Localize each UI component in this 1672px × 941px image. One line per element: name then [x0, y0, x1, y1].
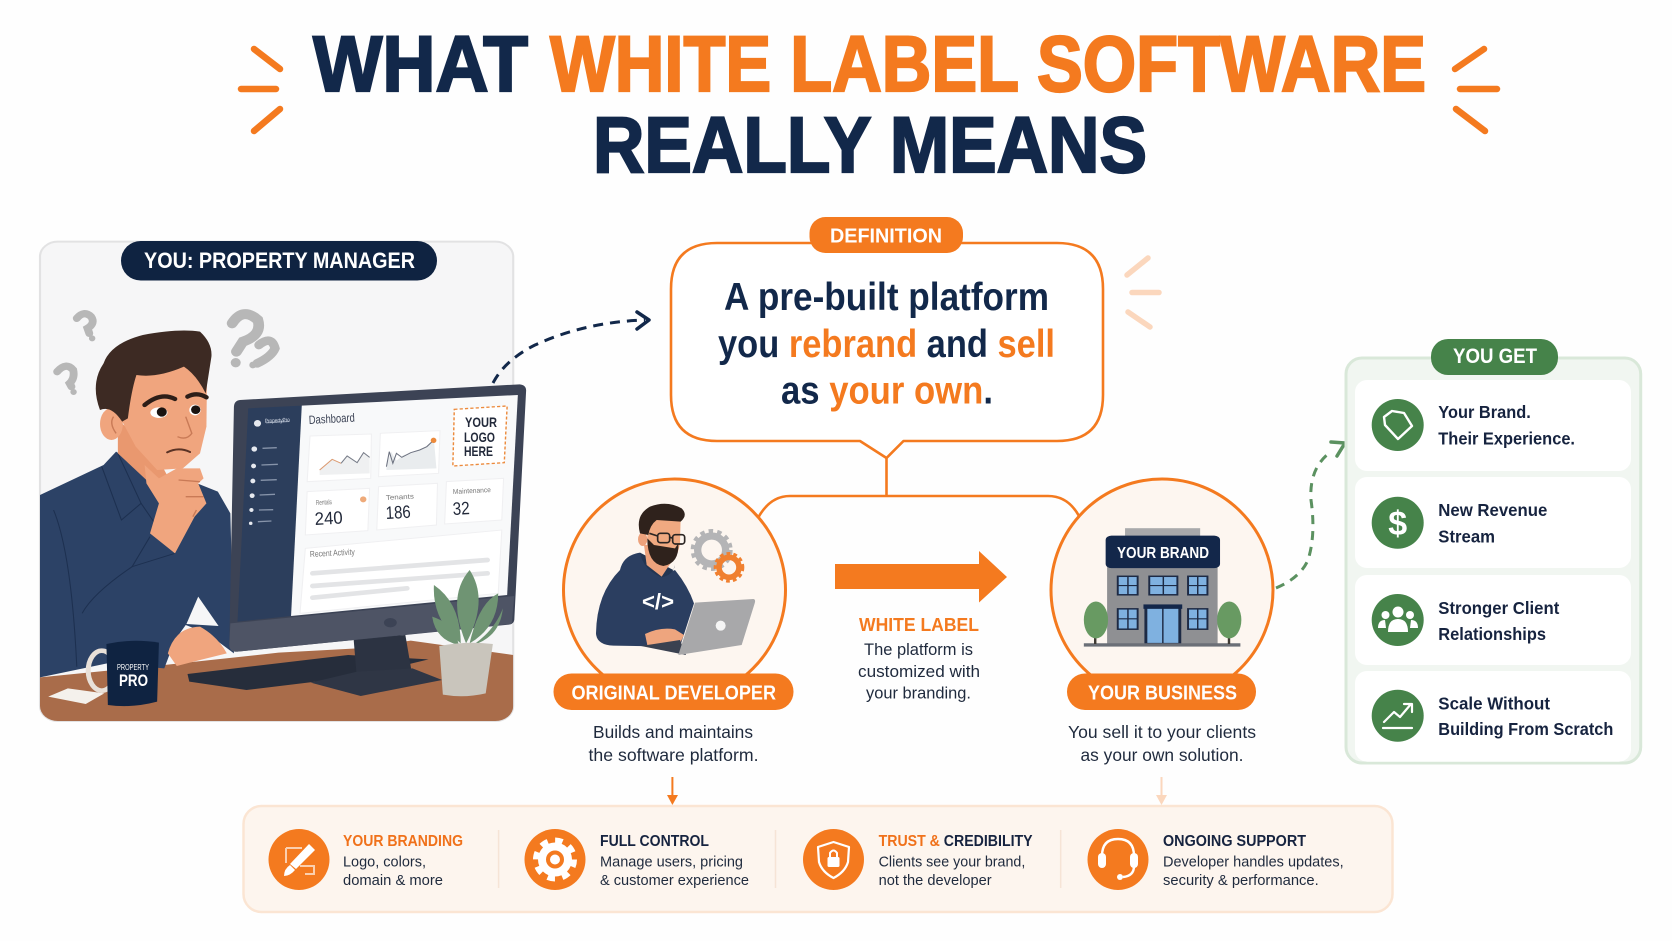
- icon: headset: [1088, 829, 1148, 890]
- panel: you get: [1346, 339, 1641, 763]
- benefit card: new revenue: [1355, 477, 1631, 568]
- icon: title sparks left: [241, 49, 280, 131]
- benefit card: your brand: Their Experience.: [1438, 428, 1575, 448]
- item: full control: & customer experience: [600, 872, 749, 889]
- keyboard: [187, 655, 429, 690]
- neck and face: [118, 424, 166, 480]
- business description: as your own solution.: [1080, 745, 1244, 765]
- benefit card: client relationships: Stronger Client: [1438, 598, 1559, 618]
- screen text: your logo here: HERE: [464, 443, 493, 459]
- benefit card: scale: Building From Scratch: [1438, 719, 1613, 739]
- benefit card: client relationships: [1355, 575, 1631, 665]
- mug label: PROPERTY: [117, 663, 149, 672]
- text block: white label: The platform is: [864, 640, 973, 659]
- item: trust and credibility: not the developer: [879, 872, 992, 889]
- benefit card: your brand: Your Brand.: [1438, 402, 1531, 422]
- definition label: DEFINITION: [830, 226, 942, 248]
- label pill: you get: YOU GET: [1453, 345, 1537, 368]
- plant: [432, 570, 503, 645]
- item: ongoing support: Developer handles updates,: [1163, 854, 1344, 871]
- screen text: your logo here: [464, 414, 497, 459]
- heading pill: you property manager: [121, 241, 437, 280]
- arrow: business to you get: [1276, 442, 1345, 588]
- screen text: dashboard: PropertyPro: [265, 418, 291, 425]
- icon: gear: [524, 829, 586, 890]
- paper and mug: [48, 688, 104, 704]
- text block: white label: customized with: [858, 662, 980, 681]
- item: your branding: YOUR BRANDING: [343, 833, 463, 850]
- developer description: Builds and maintains: [593, 722, 753, 742]
- item: your branding: domain & more: [343, 872, 443, 889]
- hand: [645, 629, 684, 645]
- illustration: thinking manager at monitor: [40, 242, 526, 723]
- panel: you property manager: [40, 241, 526, 723]
- screen text: your logo here: YOUR: [465, 414, 497, 430]
- sidebar items: [249, 420, 261, 525]
- activity rows: [312, 560, 487, 598]
- building sign text: YOUR BRAND: [1117, 545, 1209, 562]
- definition statement: as your own.: [781, 370, 993, 412]
- item: full control: Manage users, pricing: [600, 854, 743, 871]
- mug label: PRO: [119, 671, 148, 690]
- hoodie: [596, 553, 694, 647]
- icon: dollar: $: [1388, 505, 1407, 543]
- icon: title sparks right: [1455, 49, 1497, 131]
- text block: white label: [858, 615, 980, 702]
- item: ongoing support: ONGOING SUPPORT: [1163, 833, 1306, 850]
- gears: [698, 536, 726, 564]
- hoodie code symbol: </>: [642, 589, 674, 614]
- icon: dollar: [1372, 497, 1424, 549]
- item: trust and credibility: TRUST & CREDIBILITY: [879, 833, 1033, 850]
- text block: white label: your branding.: [866, 684, 971, 702]
- title: [313, 19, 1426, 189]
- illustration: developer with laptop: [596, 504, 755, 655]
- shirt: [40, 452, 234, 677]
- icon: price tag: [1372, 399, 1424, 451]
- screen text: dashboard: 32: [452, 498, 470, 519]
- business description: [1068, 722, 1256, 765]
- screen text: dashboard: Recent Activity: [310, 547, 356, 559]
- label pill: your business: YOUR BUSINESS: [1088, 682, 1237, 704]
- title: WHITE LABEL SOFTWARE: [550, 19, 1426, 108]
- monitor: [229, 384, 526, 652]
- eyes and brows: [145, 396, 175, 405]
- benefit card: scale: Scale Without: [1438, 693, 1550, 713]
- definition statement: [718, 276, 1055, 412]
- icon: people: [1372, 594, 1424, 646]
- panel: original developer: [554, 479, 794, 765]
- logo placeholder box: [453, 406, 507, 466]
- screen text: dashboard: [265, 411, 491, 559]
- table: [40, 641, 513, 723]
- screen text: dashboard: Maintenance: [453, 487, 491, 496]
- item: trust and credibility: Clients see your brand,: [879, 854, 1025, 871]
- item: ongoing support: [1088, 829, 1344, 890]
- screen text: dashboard: 240: [314, 508, 343, 529]
- icon: question marks: [57, 314, 275, 387]
- benefit card: new revenue: Stream: [1438, 526, 1495, 546]
- mug label: [117, 663, 149, 690]
- glasses: [649, 533, 685, 544]
- item: trust and credibility: [803, 829, 1033, 890]
- lower hand: [168, 627, 227, 666]
- heading pill: you property manager: YOU: PROPERTY MANAGER: [144, 248, 415, 273]
- screen text: dashboard: Tenants: [386, 494, 415, 502]
- label pill: original developer: ORIGINAL DEVELOPER: [572, 682, 777, 704]
- neck, head: [644, 543, 673, 577]
- label pill: your business: [1067, 674, 1256, 710]
- definition label: [810, 217, 963, 253]
- arrow: developer down: [667, 777, 678, 805]
- definition statement: you rebrand and sell: [718, 323, 1055, 366]
- benefit card: your brand: [1355, 380, 1631, 471]
- business description: You sell it to your clients: [1068, 722, 1256, 742]
- hair: [639, 504, 685, 535]
- panel: your business: [1051, 479, 1273, 765]
- title: WHAT: [313, 19, 528, 108]
- developer description: the software platform.: [588, 745, 758, 765]
- item: your branding: [268, 829, 463, 890]
- benefit card: new revenue: New Revenue: [1438, 500, 1548, 520]
- screen text: dashboard: Rentals: [316, 499, 332, 507]
- title: REALLY MEANS: [593, 100, 1147, 189]
- screen text: dashboard: Dashboard: [308, 411, 355, 427]
- icon: brush: [268, 829, 330, 890]
- arrow: manager to definition: [493, 312, 649, 383]
- panel: benefits strip: [244, 806, 1392, 912]
- item: full control: [524, 829, 749, 890]
- icon: definition sparks: [1127, 258, 1159, 327]
- text block: white label: WHITE LABEL: [859, 615, 979, 635]
- icon: growth chart: [1372, 690, 1424, 742]
- arrow: white label: [835, 551, 1007, 602]
- screen text: dashboard: 186: [385, 502, 411, 523]
- label pill: original developer: [554, 674, 794, 710]
- mini charts: [320, 453, 370, 475]
- label pill: you get: [1431, 339, 1558, 375]
- hand on chin: [145, 465, 206, 553]
- hair: [96, 331, 212, 422]
- item: full control: FULL CONTROL: [600, 833, 709, 850]
- beard: [647, 538, 678, 566]
- developer description: [588, 722, 758, 765]
- illustration: branded building: [1084, 528, 1241, 647]
- screen text: your logo here: LOGO: [464, 429, 495, 445]
- icon: shield lock: [803, 829, 864, 890]
- arrow: business down: [1156, 777, 1167, 805]
- panel: definition callout: [671, 217, 1103, 458]
- benefit card: client relationships: Relationships: [1438, 624, 1546, 644]
- dashboard cards: [300, 431, 504, 613]
- connector: definition to circles: [758, 458, 1079, 518]
- item: ongoing support: security & performance.: [1163, 872, 1319, 889]
- stand and base: [354, 635, 412, 682]
- definition statement: A pre-built platform: [724, 276, 1049, 319]
- benefit card: scale: [1355, 671, 1631, 762]
- item: your branding: Logo, colors,: [343, 854, 426, 871]
- laptop: [641, 640, 686, 655]
